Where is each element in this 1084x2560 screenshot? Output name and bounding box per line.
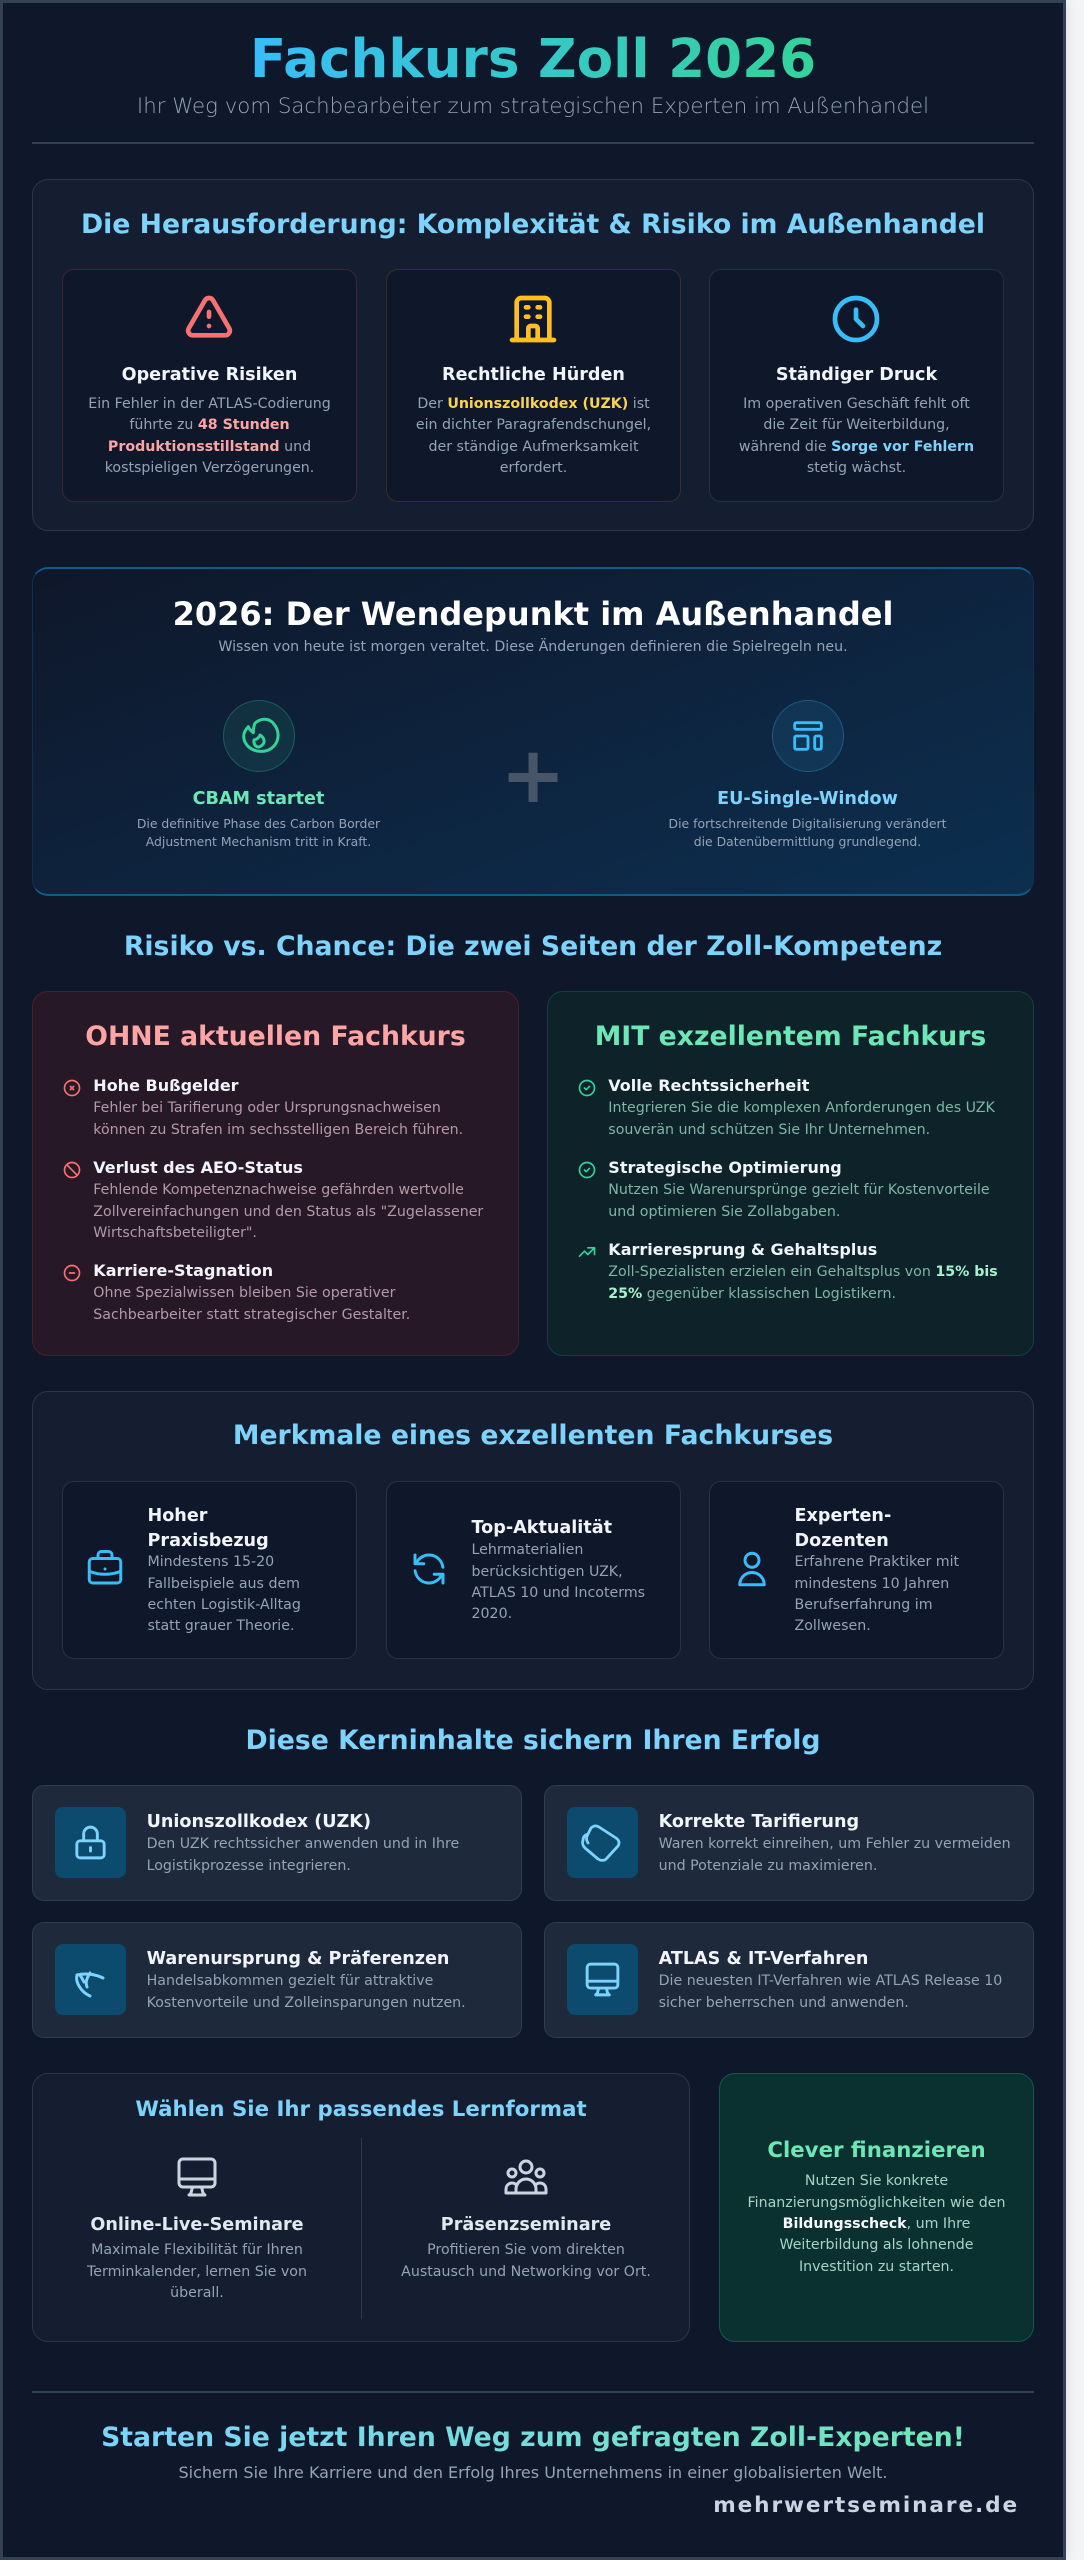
icon: window layout in circle xyxy=(772,700,844,772)
card text: Waren korrekt einreihen, um Fehler zu vermeiden xyxy=(659,1836,1011,1852)
card text: Lehrmaterialien xyxy=(472,1542,583,1558)
panel: Wendepunkt 2026 xyxy=(32,567,1034,896)
call to action heading: Starten Sie jetzt Ihren Weg zum gefragten Zoll-Experten! xyxy=(101,2422,965,2453)
card title xyxy=(148,1506,269,1550)
card: Tarifierung xyxy=(544,1785,1034,1901)
card text: Zollwesen. xyxy=(794,1618,871,1634)
item text: souverän und schützen Sie Ihr Unternehmen. xyxy=(608,1122,930,1138)
card text: sicher beherrschen und anwenden. xyxy=(659,1995,909,2011)
card text: statt grauer Theorie. xyxy=(148,1618,294,1634)
risk: Karriere-Stagnation xyxy=(64,1261,410,1323)
heading: Merkmale eines exzellenten Fachkurses xyxy=(233,1420,833,1451)
call to action text: Sichern Sie Ihre Karriere und den Erfolg Ihres Unternehmens in einer globalisierten Welt. xyxy=(178,2463,888,2482)
item text: 25% gegenüber klassischen Logistikern. xyxy=(608,1286,896,1302)
card text xyxy=(472,1542,645,1622)
card text xyxy=(416,396,651,476)
card text: während die Sorge vor Fehlern xyxy=(739,439,974,455)
item title: Hohe Bußgelder xyxy=(93,1076,239,1095)
icon: monitor xyxy=(173,2153,221,2201)
icon: refresh xyxy=(414,1554,444,1584)
icon: building xyxy=(510,296,556,342)
card text xyxy=(659,1971,1002,2014)
plus sign: + xyxy=(500,731,566,821)
text: Nutzen Sie konkrete xyxy=(805,2173,948,2189)
card: Unionszollkodex xyxy=(32,1785,522,1901)
benefit: Optimierung xyxy=(578,1158,990,1220)
card text: Die neuesten IT-Verfahren wie ATLAS Release 10 xyxy=(659,1973,1002,1989)
card: Ständiger Druck xyxy=(709,269,1004,502)
text xyxy=(720,2171,1033,2278)
card: Praxisbezug xyxy=(62,1481,357,1659)
panel: Merkmale xyxy=(32,1391,1034,1690)
card text: ein dichter Paragrafendschungel, xyxy=(416,417,651,433)
item text xyxy=(93,1100,463,1138)
icon: group of people xyxy=(502,2153,550,2201)
format text: Terminkalender, lernen Sie von xyxy=(87,2264,307,2280)
panel: Finanzierung xyxy=(719,2073,1034,2342)
card: Operative Risiken xyxy=(62,269,357,502)
item title: Verlust des AEO-Status xyxy=(93,1158,303,1177)
format text xyxy=(47,2240,347,2304)
title: Fachkurs Zoll 2026 xyxy=(250,28,816,90)
icon: tag xyxy=(567,1807,638,1878)
item text xyxy=(137,816,380,849)
item title: Karrieresprung & Gehaltsplus xyxy=(608,1240,877,1259)
card text xyxy=(147,1973,466,2011)
card text: 2020. xyxy=(472,1606,512,1622)
card title: ATLAS & IT-Verfahren xyxy=(659,1949,868,1969)
risk: Bußgelder xyxy=(64,1076,463,1138)
item title: Strategische Optimierung xyxy=(608,1158,842,1177)
item title: EU-Single-Window xyxy=(717,789,898,809)
item title: CBAM startet xyxy=(193,789,324,809)
card text: stetig wächst. xyxy=(807,460,906,476)
format text: Maximale Flexibilität für Ihren xyxy=(91,2242,303,2258)
subtitle: Ihr Weg vom Sachbearbeiter zum strategischen Experten im Außenhandel xyxy=(137,94,929,119)
panel: Lernformat xyxy=(32,2073,690,2342)
item text xyxy=(608,1264,998,1302)
card text: die Zeit für Weiterbildung, xyxy=(763,417,950,433)
text: Finanzierungsmöglichkeiten wie den xyxy=(748,2195,1005,2211)
item text: Wirtschaftsbeteiligter". xyxy=(93,1225,257,1241)
icon: user xyxy=(738,1552,766,1586)
icon: warning triangle xyxy=(186,296,232,338)
card text: mindestens 10 Jahren xyxy=(794,1576,949,1592)
card title xyxy=(794,1506,891,1550)
card text: führte zu 48 Stunden xyxy=(129,417,290,433)
item text: können zu Strafen im sechsstelligen Bereich führen. xyxy=(93,1122,463,1138)
card title: Experten- xyxy=(794,1506,891,1526)
subheading: Wissen von heute ist morgen veraltet. Diese Änderungen definieren die Spielregeln neu. xyxy=(218,639,848,655)
risk: AEO-Status xyxy=(64,1158,484,1241)
item text: Ohne Spezialwissen bleiben Sie operativer xyxy=(93,1285,395,1301)
icon: ban xyxy=(64,1162,80,1178)
card text: Berufserfahrung im xyxy=(794,1597,933,1613)
card text: Logistikprozesse integrieren. xyxy=(147,1858,351,1874)
card text: Handelsabkommen gezielt für attraktive xyxy=(147,1973,433,1989)
card: Dozenten xyxy=(709,1481,1004,1659)
card text: Produktionsstillstand und xyxy=(108,439,311,455)
text: Investition zu starten. xyxy=(799,2259,954,2275)
item text: Zollvereinfachungen und den Status als "Zugelassener xyxy=(93,1204,483,1220)
card text: Im operativen Geschäft fehlt oft xyxy=(743,396,970,412)
format text: überall. xyxy=(170,2285,224,2301)
panel: ohne Fachkurs xyxy=(32,991,519,1356)
card title: Operative Risiken xyxy=(122,365,297,385)
card text: ATLAS 10 und Incoterms xyxy=(472,1585,645,1601)
item: EU-Single-Window xyxy=(669,700,946,849)
item title: Karriere-Stagnation xyxy=(93,1261,273,1280)
item text: Die definitive Phase des Carbon Border xyxy=(137,816,380,831)
card text: Der Unionszollkodex (UZK) ist xyxy=(417,396,650,412)
heading: Die Herausforderung: Komplexität & Risiko im Außenhandel xyxy=(81,208,985,240)
item text: und optimieren Sie Zollabgaben. xyxy=(608,1204,840,1220)
item text: Zoll-Spezialisten erzielen ein Gehaltsplus von 15% bis xyxy=(608,1264,998,1280)
item text xyxy=(608,1182,990,1220)
icon: origin hand-globe shape xyxy=(55,1944,126,2015)
panel heading: MIT exzellentem Fachkurs xyxy=(595,1021,986,1052)
card text xyxy=(739,396,974,476)
card title: Warenursprung & Präferenzen xyxy=(147,1949,449,1969)
icon: flame in circle xyxy=(222,700,294,772)
item text: die Datenübermittlung grundlegend. xyxy=(694,834,921,849)
item text: Die fortschreitende Digitalisierung verändert xyxy=(669,816,946,831)
icon: briefcase xyxy=(88,1550,122,1584)
card title: Hoher xyxy=(148,1506,207,1526)
card text: echten Logistik-Alltag xyxy=(148,1597,301,1613)
card text xyxy=(794,1554,959,1634)
card text: Erfahrene Praktiker mit xyxy=(794,1554,959,1570)
icon: check circle xyxy=(578,1162,596,1178)
item: CBAM xyxy=(137,700,380,849)
item title: Volle Rechtssicherheit xyxy=(608,1076,809,1095)
panel heading: OHNE aktuellen Fachkurs xyxy=(85,1021,466,1052)
item text: Fehler bei Tarifierung oder Ursprungsnachweisen xyxy=(93,1100,441,1116)
item text xyxy=(669,816,946,849)
card title: Ständiger Druck xyxy=(776,365,937,385)
panel: mit Fachkurs xyxy=(547,991,1034,1356)
icon: minus circle xyxy=(64,1264,80,1282)
card text: Ein Fehler in der ATLAS-Codierung xyxy=(88,396,331,412)
item text: Sachbearbeiter statt strategischer Gestalter. xyxy=(93,1307,410,1323)
format text: Profitieren Sie vom direkten xyxy=(427,2242,625,2258)
heading: 2026: Der Wendepunkt im Außenhandel xyxy=(173,595,893,633)
icon: clock xyxy=(832,296,880,342)
item text: Nutzen Sie Warenursprünge gezielt für Kostenvorteile xyxy=(608,1182,990,1198)
card text: der ständige Aufmerksamkeit xyxy=(428,439,639,455)
icon: check circle xyxy=(578,1080,596,1096)
card title: Top-Aktualität xyxy=(472,1518,612,1538)
heading: Wählen Sie Ihr passendes Lernformat xyxy=(135,2097,587,2122)
card text xyxy=(148,1554,301,1634)
benefit: Rechtssicherheit xyxy=(578,1076,995,1138)
card text: Kostenvorteile und Zolleinsparungen nutzen. xyxy=(147,1995,466,2011)
card text: Den UZK rechtssicher anwenden und in Ihre xyxy=(147,1836,459,1852)
text: Weiterbildung als lohnende xyxy=(780,2237,973,2253)
card text: Fallbeispiele aus dem xyxy=(148,1576,300,1592)
card text xyxy=(659,1836,1011,1874)
item text: Integrieren Sie die komplexen Anforderungen des UZK xyxy=(608,1100,995,1116)
brand: mehrwertseminare.de xyxy=(713,2493,1019,2518)
card title: Unionszollkodex (UZK) xyxy=(147,1812,371,1832)
format text xyxy=(376,2240,676,2283)
card text: kostspieligen Verzögerungen. xyxy=(105,460,314,476)
item text xyxy=(608,1100,995,1138)
icon: trending up xyxy=(578,1247,596,1257)
icon: lock xyxy=(55,1807,126,1878)
item text xyxy=(93,1285,410,1323)
item text: Adjustment Mechanism tritt in Kraft. xyxy=(146,834,371,849)
card title: Rechtliche Hürden xyxy=(442,365,625,385)
icon: x circle xyxy=(64,1080,80,1096)
heading: Clever finanzieren xyxy=(767,2138,986,2163)
card text: Mindestens 15-20 xyxy=(148,1554,274,1570)
heading: Risiko vs. Chance: Risiko vs. Chance: Die zwei Seiten der Zoll-Kompetenz xyxy=(124,931,942,962)
format title: Präsenzseminare xyxy=(441,2215,611,2235)
card text: und Potenziale zu maximieren. xyxy=(659,1858,877,1874)
format: presence xyxy=(376,2150,676,2320)
heading: Kerninhalte: Diese Kerninhalte sichern Ihren Erfolg xyxy=(245,1725,821,1756)
item text xyxy=(93,1182,484,1241)
format: online xyxy=(47,2150,347,2320)
card text: berücksichtigen UZK, xyxy=(472,1564,623,1580)
panel: Herausforderung xyxy=(32,179,1034,531)
card: ATLAS xyxy=(544,1922,1034,2038)
icon: monitor xyxy=(567,1944,638,2015)
card: Warenursprung xyxy=(32,1922,522,2038)
item text: Fehlende Kompetenznachweise gefährden wertvolle xyxy=(93,1182,464,1198)
format title: Online-Live-Seminare xyxy=(90,2215,304,2235)
card title: Dozenten xyxy=(794,1530,889,1550)
card: Rechtliche Hürden xyxy=(386,269,681,502)
card title: Praxisbezug xyxy=(148,1530,269,1550)
card title: Korrekte Tarifierung xyxy=(659,1812,859,1832)
card: Aktualität xyxy=(386,1481,681,1659)
format text: Austausch und Networking vor Ort. xyxy=(401,2264,651,2280)
benefit: Gehaltsplus xyxy=(578,1240,998,1302)
text: Bildungsscheck, um Ihre xyxy=(783,2216,970,2232)
card text: erfordert. xyxy=(500,460,567,476)
card text xyxy=(147,1836,459,1874)
card text xyxy=(88,396,331,476)
